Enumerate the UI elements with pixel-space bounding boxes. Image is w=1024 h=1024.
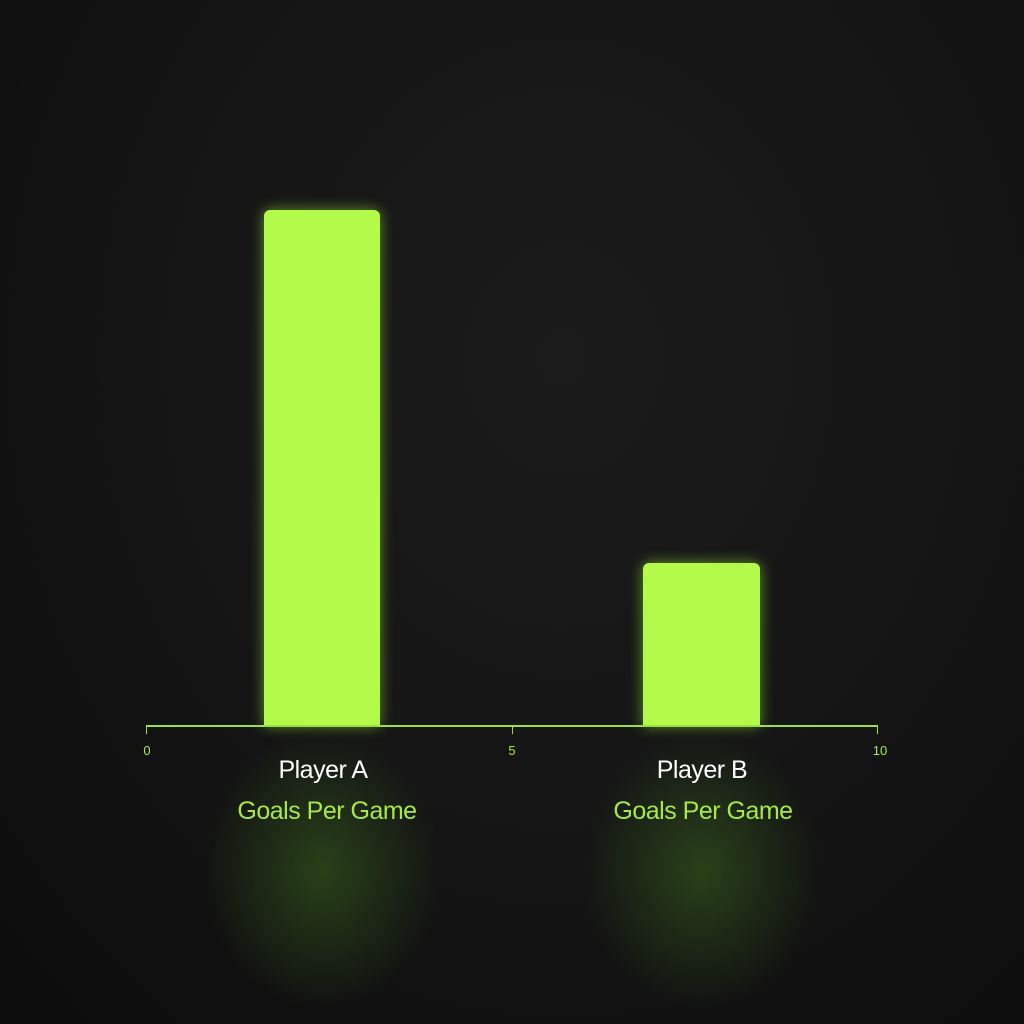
- tick label 0: 0: [143, 743, 151, 758]
- metric A: Goals Per Game: [237, 797, 417, 825]
- tick label 10: 10: [873, 743, 887, 758]
- tick label 5: 5: [508, 743, 516, 758]
- glow: player A reflection: [202, 730, 442, 1010]
- axis: [146, 725, 878, 734]
- bar: player B: [643, 563, 760, 726]
- glow: player B reflection: [582, 730, 822, 1010]
- metric B: Goals Per Game: [613, 797, 793, 825]
- label: Player B: Player B: [657, 756, 747, 784]
- label: Player A: Player A: [278, 756, 368, 784]
- bar: player A: [264, 210, 380, 726]
